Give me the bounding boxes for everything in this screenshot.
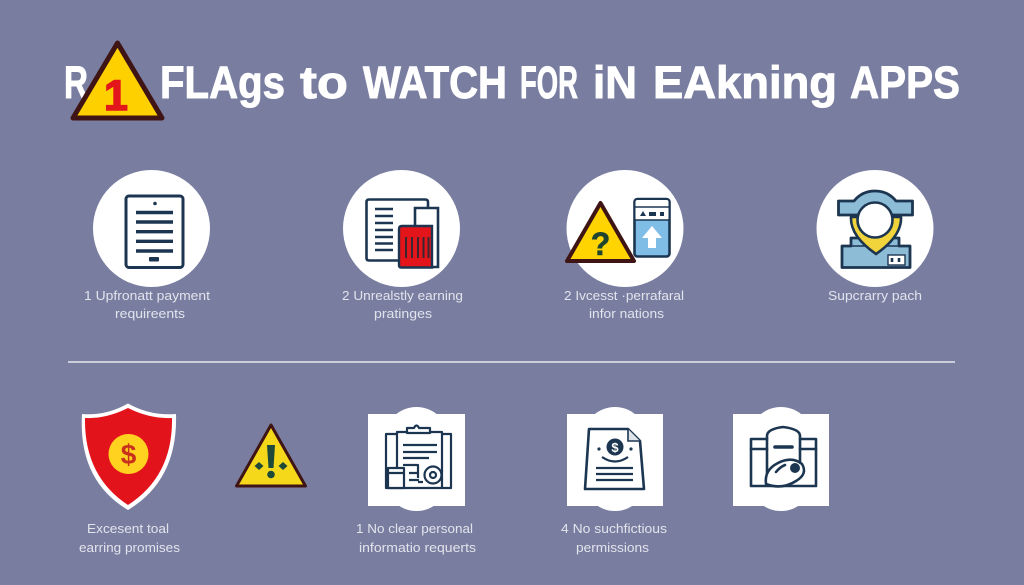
icon: clipboard bbox=[368, 407, 465, 511]
title: EAkning bbox=[653, 57, 837, 108]
label: 2 Ivcesst ·perrafaral bbox=[564, 288, 684, 303]
panel: personal information bbox=[564, 170, 684, 321]
label: 2 Unrealstly earning bbox=[342, 288, 463, 303]
icon: arch and shield pin bbox=[816, 170, 934, 287]
icon: red shield with dollar coin: $ bbox=[121, 439, 137, 470]
icon: warning triangle with number 1: 1 bbox=[104, 72, 128, 120]
icon: document with coin bbox=[567, 407, 663, 511]
title: R bbox=[64, 57, 88, 108]
panel: no clear personal information bbox=[356, 407, 477, 555]
title: FLAgs bbox=[160, 57, 285, 108]
label: Supcrarry pach bbox=[828, 288, 922, 303]
title: WATCH bbox=[363, 57, 507, 108]
icon: warning triangle with exclamation bbox=[236, 425, 306, 486]
label: permissions bbox=[576, 540, 650, 555]
label bbox=[79, 521, 181, 555]
label: Excesent toal bbox=[87, 521, 169, 536]
label: requireents bbox=[115, 306, 186, 321]
label bbox=[84, 288, 210, 321]
icon: building with mouse shape bbox=[733, 407, 829, 511]
icon: document with coin: $ bbox=[611, 440, 619, 455]
panel: no sufficient permissions bbox=[561, 407, 668, 555]
panel: unrealistic earning bbox=[342, 170, 463, 321]
label bbox=[342, 288, 463, 321]
icon: warning and phone bbox=[566, 170, 684, 287]
panel: excessive earning promises bbox=[79, 404, 181, 555]
title: FOR bbox=[520, 57, 578, 108]
title: to bbox=[300, 57, 348, 108]
label bbox=[356, 521, 477, 555]
label: 1 Upfronatt payment bbox=[84, 288, 210, 303]
label bbox=[561, 521, 668, 555]
label: earring promises bbox=[79, 540, 181, 555]
icon: warning and phone: ? bbox=[591, 226, 610, 262]
title bbox=[64, 57, 960, 108]
label: pratinges bbox=[374, 306, 433, 321]
panel: upfront payment bbox=[84, 170, 210, 321]
icon: documents with red folder bbox=[343, 170, 460, 287]
label: 4 No suchfictious bbox=[561, 521, 668, 536]
label: informatio requerts bbox=[359, 540, 477, 555]
label: 1 No clear personal bbox=[356, 521, 473, 536]
title: APPS bbox=[850, 57, 960, 108]
icon: warning triangle with number 1 bbox=[73, 43, 162, 120]
panel: supplementary patch bbox=[816, 170, 934, 303]
icon: red shield with dollar coin bbox=[82, 404, 176, 510]
label: infor nations bbox=[589, 306, 665, 321]
label bbox=[564, 288, 684, 321]
icon: tablet bbox=[93, 170, 210, 287]
title: iN bbox=[593, 57, 637, 108]
